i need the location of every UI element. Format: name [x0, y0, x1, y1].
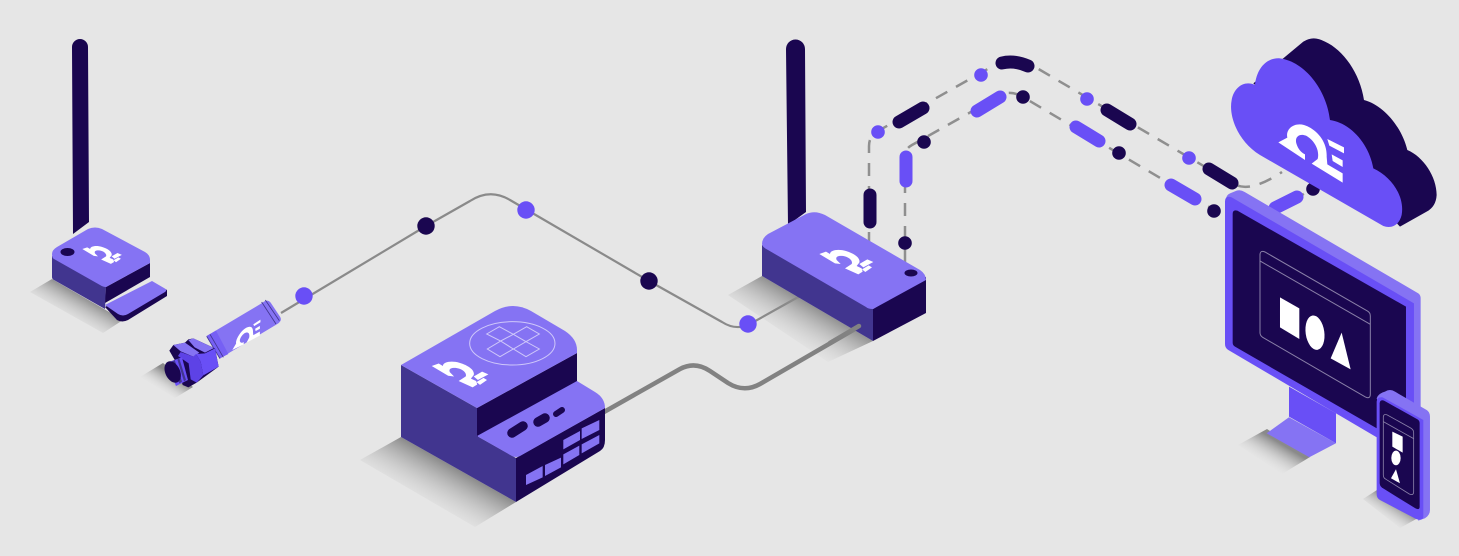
- cloud front face: [1231, 58, 1402, 227]
- screen: [1233, 210, 1406, 428]
- wireless sensor device: [52, 39, 167, 322]
- proximity sensor: [161, 300, 281, 387]
- gateway device: [762, 40, 926, 341]
- phone side: [1377, 390, 1430, 521]
- phone screen: [1380, 400, 1420, 509]
- logo: [819, 250, 873, 274]
- phone app shapes: [1391, 432, 1403, 483]
- phone window outline: [1383, 414, 1414, 495]
- screw hole: [904, 270, 918, 276]
- phone: [1377, 390, 1430, 521]
- stand base: [1267, 417, 1336, 457]
- monitor: [1225, 190, 1421, 457]
- right face: [873, 277, 926, 341]
- cable end into gateway: [830, 326, 859, 343]
- cylinder body: [207, 300, 281, 359]
- port windows: [526, 420, 599, 485]
- cloud back extrusion: [1253, 38, 1437, 227]
- front panel: [516, 408, 605, 502]
- mounting foot: [105, 281, 167, 322]
- data packets on cable: [295, 201, 757, 333]
- antenna: [72, 39, 89, 234]
- data packets on outer link: [870, 62, 1232, 222]
- wireless link: inner dashed line: [905, 93, 1228, 262]
- top face: [52, 228, 150, 287]
- shadow: proximity sensor: [140, 363, 193, 398]
- shadow: controller: [360, 437, 516, 527]
- shadow: gateway: [728, 276, 873, 362]
- end cap: [161, 359, 184, 385]
- cloud: [1231, 38, 1437, 227]
- link to cloud: monitor connector: [1297, 184, 1320, 198]
- app shapes: [1280, 297, 1351, 369]
- screw hole: [60, 248, 74, 256]
- logo: [432, 362, 488, 387]
- top face: [762, 212, 926, 309]
- shadow: phone: [1363, 490, 1418, 528]
- stand neck: [1289, 387, 1336, 443]
- logo: cloud: [1278, 124, 1344, 183]
- app window outline: [1260, 251, 1370, 398]
- logo: [82, 246, 122, 264]
- upper step face: [477, 353, 577, 437]
- side faces: [52, 256, 150, 309]
- controller device: [401, 306, 605, 502]
- left face: [762, 245, 873, 341]
- phone front: [1377, 397, 1423, 520]
- wireless link: outer dashed line: [869, 59, 1282, 245]
- button slots: [512, 410, 562, 433]
- nut faces: [173, 343, 199, 357]
- nut base: [169, 338, 219, 387]
- emblem: circle with cross: [470, 322, 555, 365]
- shadow: monitor stand: [1238, 429, 1310, 474]
- bezel front: [1225, 197, 1414, 438]
- bezel top and side: [1226, 190, 1421, 410]
- neck: [167, 357, 188, 386]
- logo: [232, 310, 260, 367]
- cable: controller to gateway: [604, 326, 860, 412]
- data packets on inner link: [898, 90, 1320, 250]
- left face: [401, 365, 516, 502]
- hex nut and threaded nose: [161, 338, 219, 387]
- upper top face: [401, 306, 577, 408]
- lower top face: [477, 381, 605, 457]
- antenna: [786, 40, 806, 225]
- shadow: wireless sensor: [30, 279, 123, 333]
- cable: proximity sensor to gateway: [281, 194, 800, 327]
